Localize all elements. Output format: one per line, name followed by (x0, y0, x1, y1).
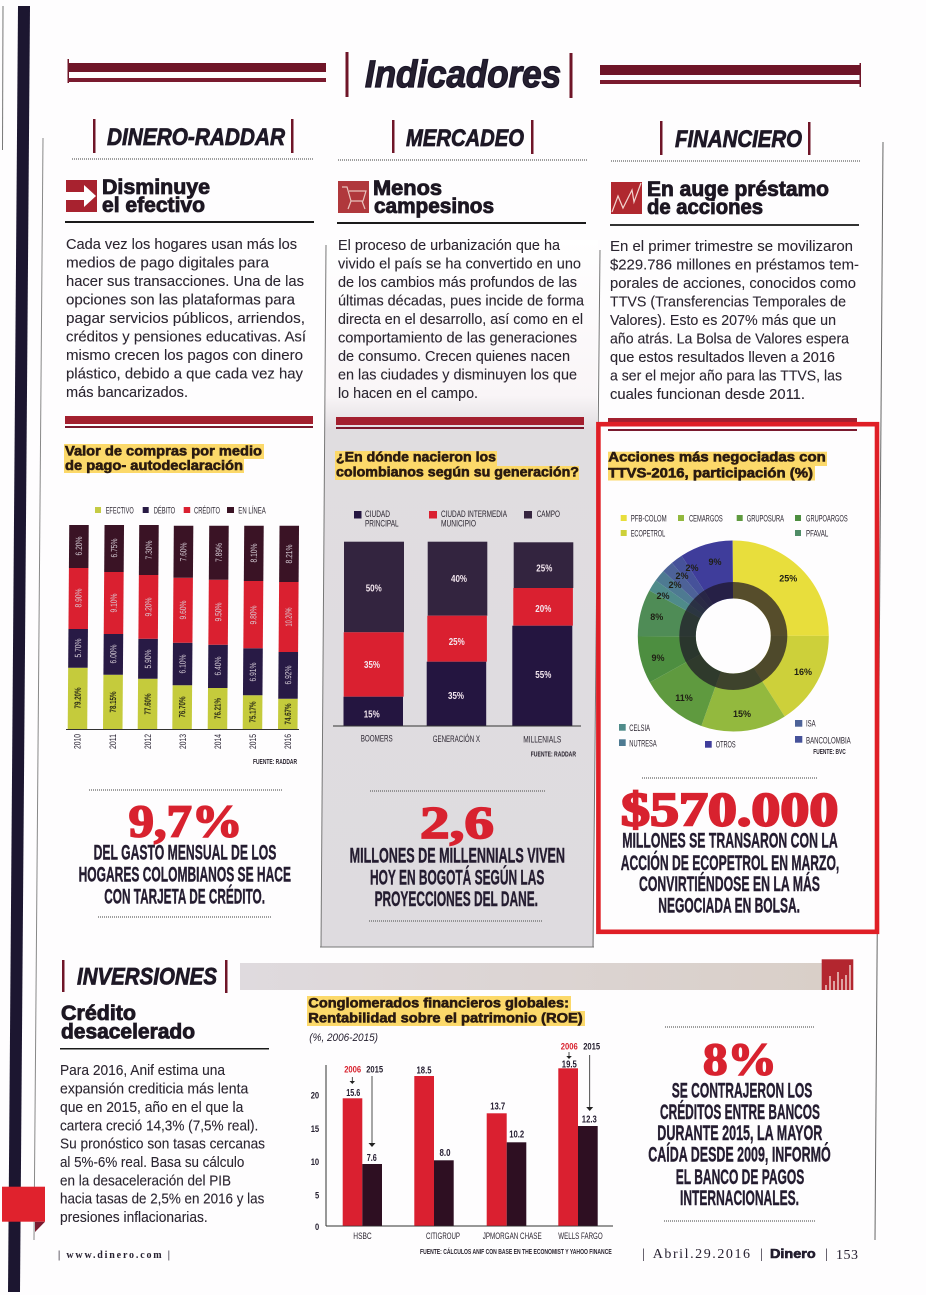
legend: payment methods: EN LÍNEA (238, 506, 266, 516)
donut chart: share by stock: 8% (650, 612, 663, 622)
bar 2015: 8.10% (249, 543, 259, 562)
year axis labels: 2011 (108, 734, 118, 749)
y axis labels: 0 (315, 1222, 319, 1232)
bar 2015: 6.91% (248, 662, 258, 681)
bar: boomers: 50% (366, 584, 382, 594)
x axis labels: JPMORGAN CHASE (483, 1231, 542, 1241)
stacked bar chart: birthplace by generation: MILLENIALS (523, 734, 561, 744)
legend: birthplace: CIUDAD (365, 509, 390, 519)
icon: shopping cart (338, 181, 369, 213)
text block: inversiones: que en 2015, año en el que la (60, 1099, 244, 1116)
bars: JPMorgan Chase (487, 1101, 526, 1226)
legend: bottom of donut: ISA (806, 719, 816, 729)
bar: boomers (344, 542, 404, 726)
callout: 8%: DURANTE 2015, LA MAYOR (657, 1122, 822, 1145)
page spine bar (8, 6, 30, 1292)
bar 2014: 76.21% (213, 698, 223, 719)
text block: inversiones: hacia tasas de 2,5% en 2016 y las (60, 1190, 264, 1208)
text block: financiero: a ser el mejor año para las TTVS, las (610, 368, 842, 384)
callout: 8% (648, 1033, 831, 1210)
footer: date, magazine, page: 153 (836, 1248, 858, 1263)
bar 2013 (172, 526, 193, 729)
text block: financiero: que estos resultados lleven a 2016 (610, 349, 835, 366)
y axis labels: 5 (315, 1190, 319, 1200)
donut chart: share by stock: 16% (794, 667, 812, 677)
bar 2012: 5.90% (143, 649, 153, 668)
bar: generacion x: 25% (449, 637, 465, 648)
bars: Wells Fargo: 19.5 (562, 1059, 577, 1070)
bar 2010: 79.20% (73, 688, 83, 709)
legend: bottom of donut: CELSIA (629, 723, 650, 733)
year axis labels: 2015 (248, 734, 258, 749)
donut chart: share by stock (650, 557, 812, 719)
icon: arrow (66, 180, 97, 212)
donut chart: share by stock: 25% (779, 574, 797, 584)
text block: inversiones (60, 1062, 265, 1226)
bars: Citigroup: 18.5 (416, 1065, 432, 1076)
legend: birthplace: CIUDAD INTERMEDIA (441, 509, 507, 519)
bar: millenials (512, 542, 573, 726)
text block: inversiones: Su pronóstico son tasas cercanas (60, 1136, 265, 1153)
year axis labels: 2016 (283, 734, 293, 749)
heading: MERCADEO: MERCADEO (406, 125, 524, 152)
stacked bar chart: birthplace by generation (333, 542, 581, 744)
bar: boomers: 35% (364, 660, 380, 671)
text block: financiero: $229.786 millones en préstamos tem- (610, 256, 859, 274)
text block: dinero-raddar: medios de pago digitales para (66, 254, 270, 272)
bar 2011: 6.00% (108, 644, 118, 664)
donut chart: share by stock: 2% (656, 591, 670, 601)
x axis labels: CITIGROUP (426, 1231, 460, 1241)
callout: 9,7% (79, 796, 291, 908)
subheading: Menos campesinos: campesinos (374, 195, 494, 218)
callout: 2,6 (350, 797, 565, 911)
subheading: Disminuye el efectivo (102, 176, 210, 217)
bar 2015: 75.17% (248, 701, 258, 722)
legend: top of donut: ECOPETROL (631, 529, 665, 539)
source: anif: FUENTE: CÁLCULOS ANIF CON BASE EN THE ECONOMIST Y YAHOO FINANCE (420, 1247, 612, 1256)
text block: mercadeo (338, 237, 585, 402)
text block: mercadeo: de los cambios más profundos de las (338, 274, 577, 291)
bar 2010: 8.90% (73, 589, 84, 608)
bar: millenials: 25% (536, 564, 552, 574)
legend: top of donut: PFB-COLOM (631, 514, 667, 524)
subheading: Menos campesinos: Menos (373, 177, 442, 200)
footer: date, magazine, page: Dinero (770, 1246, 816, 1261)
chart title: conglomerados: Rentabilidad sobre el patrimonio (ROE) (308, 1010, 583, 1026)
bar 2011: 6.75% (109, 538, 119, 558)
callout: 2,6: PROYECCIONES DEL DANE. (375, 888, 538, 911)
text block: mercadeo: de consumo. Crecen quienes nacen (338, 348, 570, 365)
footer: website: | www.dinero.com | (58, 1250, 170, 1261)
text block: inversiones: al 5%-6% real. Basa su cálculo (60, 1154, 244, 1171)
source: raddar middle: FUENTE: RADDAR (531, 752, 576, 759)
x axis labels: HSBC (353, 1231, 372, 1241)
annotation: HSBC years (344, 1065, 383, 1147)
callout: 9,7%: HOGARES COLOMBIANOS SE HACE (79, 864, 291, 887)
year axis labels: 2014 (213, 734, 223, 749)
subheading: En auge préstamo de acciones: de acciones (647, 196, 763, 219)
text block: dinero-raddar: créditos y pensiones educativas. Así (66, 328, 307, 346)
bars: HSBC (343, 1088, 382, 1226)
text block: dinero-raddar: mismo crecen los pagos con dinero (66, 347, 303, 364)
chart title: acciones (608, 449, 827, 480)
text block: mercadeo: en las ciudades y disminuyen los que (338, 366, 577, 384)
bar 2010 (68, 525, 89, 729)
y axis labels: 20 (311, 1090, 319, 1100)
legend: top of donut: PFAVAL (806, 529, 828, 539)
annotation: Wells Fargo years: 2006 (561, 1041, 578, 1051)
bars: HSBC: 15.6 (346, 1088, 361, 1099)
stacked bar chart: payment method by year (68, 525, 299, 729)
legend: bottom of donut: FUENTE: BVC (813, 749, 846, 756)
footer: date, magazine, page (642, 1246, 858, 1263)
annotation: HSBC years: 2006 (344, 1065, 361, 1075)
year axis labels: 2013 (178, 734, 188, 749)
bar 2014: 6.40% (213, 657, 223, 676)
text block: financiero: En el primer trimestre se movilizaron (610, 238, 853, 255)
bar 2015 (243, 526, 264, 729)
subheading: Credito desacelerado: desacelerado (61, 1020, 195, 1043)
text block: financiero: cuales funcionan desde 2011. (610, 386, 805, 403)
text block: inversiones: Para 2016, Anif estima una (60, 1062, 226, 1079)
chart title: valor de compras: Valor de compras por medio (65, 442, 262, 458)
panel: grey middle column background (321, 240, 598, 947)
icon: bars (822, 959, 853, 990)
chart title: conglomerados: Conglomerados financieros globales: (308, 994, 569, 1010)
callout: 2,6: 2,6 (420, 797, 494, 848)
bar 2016: 74.67% (283, 703, 293, 724)
footer: date, magazine, page: | (760, 1247, 763, 1262)
highlight frame around financiero chart (598, 424, 877, 932)
legend: top of donut: GRUPOSURA (747, 514, 784, 524)
donut chart: share by stock: 9% (651, 653, 665, 663)
legend: birthplace (354, 509, 560, 529)
bar 2011 (103, 525, 124, 729)
text block: inversiones: en la desaceleración del PIB (60, 1172, 231, 1189)
bars: JPMorgan Chase: 13.7 (490, 1101, 506, 1112)
donut chart: share by stock: 9% (708, 557, 722, 567)
callout: $570.000 (621, 784, 839, 918)
stacked bar chart: birthplace by generation: GENERACIÓN X (433, 734, 480, 744)
bar 2015: 9.80% (248, 605, 258, 624)
callout: 2,6: HOY EN BOGOTÁ SEGÚN LAS (370, 865, 544, 889)
subheading: Credito desacelerado (61, 1002, 195, 1043)
y axis labels: 10 (311, 1157, 319, 1167)
bars: Citigroup (414, 1065, 454, 1226)
bars: Citigroup: 8.0 (440, 1148, 451, 1159)
bar 2011: 9.10% (109, 594, 119, 612)
text block: financiero: Valores). Esto es 207% más que un (610, 312, 836, 329)
legend: payment methods: DÉBITO (154, 506, 175, 516)
subheading: Disminuye el efectivo: Disminuye (102, 176, 210, 199)
x axis labels (353, 1231, 603, 1241)
subheading: En auge préstamo de acciones: En auge préstamo (647, 178, 829, 201)
bar: generacion x: 35% (448, 691, 464, 702)
subheading: Credito desacelerado: Crédito (61, 1002, 136, 1025)
bar 2016: 6.92% (283, 665, 293, 684)
bar 2012: 9.20% (143, 597, 153, 616)
bars: Wells Fargo (558, 1059, 598, 1226)
bar: generacion x (427, 542, 487, 726)
title (68, 52, 861, 98)
source: raddar: FUENTE: RADDAR (253, 759, 297, 766)
bars: JPMorgan Chase: 10.2 (509, 1130, 525, 1141)
bar: boomers: 15% (364, 710, 380, 720)
legend: top of donut: CEMARGOS (689, 514, 723, 524)
bar 2016: 10.20% (284, 607, 294, 626)
donut chart: share by stock: 2% (668, 580, 682, 590)
legend: birthplace: CAMPO (537, 509, 560, 519)
annotation: HSBC years: 2015 (366, 1065, 383, 1075)
legend: payment methods (95, 506, 266, 516)
bars: Wells Fargo: 12.3 (582, 1114, 597, 1125)
y axis labels: 15 (311, 1124, 319, 1134)
icon: rising line chart (611, 182, 642, 214)
chart title: generaciones: colombianos según su generación? (336, 464, 579, 480)
legend: birthplace: PRINCIPAL (365, 519, 399, 529)
callout: 8%: 8% (703, 1033, 777, 1084)
bar 2012: 77.60% (143, 693, 153, 714)
bar chart: ROE (311, 1041, 613, 1241)
legend: bottom of donut (619, 719, 851, 756)
text block: mercadeo: lo hacen en el campo. (338, 385, 478, 402)
text block: mercadeo: directa en el desarrollo, así como en el (338, 311, 583, 328)
legend: bottom of donut: BANCOLOMBIA (806, 735, 851, 745)
bar 2014: 9.50% (213, 603, 223, 622)
donut chart: share by stock: 11% (675, 693, 693, 703)
footer: date, magazine, page: | (642, 1247, 645, 1262)
legend: payment methods: EFECTIVO (106, 506, 134, 516)
heading: FINANCIERO: FINANCIERO (675, 126, 802, 153)
bars: HSBC: 7.6 (367, 1153, 377, 1164)
y axis labels (311, 1090, 319, 1232)
legend: bottom of donut: OTROS (716, 740, 736, 750)
year axis labels: 2012 (143, 734, 153, 749)
legend: payment methods: CRÉDITO (194, 506, 220, 516)
chart title: generaciones (335, 448, 579, 480)
chart title: acciones: TTVS-2016, participación (%) (608, 464, 813, 480)
text block: dinero-raddar: hacer sus transacciones. Una de las (66, 273, 304, 290)
text block: mercadeo: comportamiento de las generaciones (338, 330, 577, 346)
text block: financiero: TTVS (Transferencias Temporales de (610, 294, 846, 310)
text block: dinero-raddar: más bancarizados. (66, 384, 188, 401)
chart title: generaciones: ¿En dónde nacieron los (336, 448, 496, 464)
callout: 2,6: MILLONES DE MILLENNIALS VIVEN (350, 844, 565, 867)
text block: inversiones: cartera creció 14,3% (7,5% real). (60, 1117, 258, 1134)
year axis labels (72, 734, 293, 749)
heading: DINERO-RADDAR: DINERO-RADDAR (107, 124, 286, 151)
year axis labels: 2010 (72, 734, 82, 749)
text block: dinero-raddar: opciones son las plataformas para (66, 292, 296, 308)
footer: date, magazine, page: | (825, 1247, 828, 1262)
bar 2011: 78.15% (108, 691, 118, 712)
bar 2013: 76.70% (177, 696, 187, 717)
bar 2014: 7.89% (214, 543, 224, 562)
legend: top of donut (621, 514, 848, 539)
x axis labels: WELLS FARGO (558, 1231, 603, 1241)
bar 2013: 6.10% (178, 654, 188, 674)
subheading: Menos campesinos (373, 177, 494, 218)
legend: top of donut: GRUPOARGOS (806, 514, 848, 524)
donut chart: share by stock: 2% (675, 571, 689, 581)
grey band (240, 963, 822, 990)
donut chart: share by stock: 15% (733, 709, 751, 719)
bar 2013: 7.60% (178, 542, 189, 562)
bar: generacion x: 40% (451, 574, 467, 585)
title: Indicadores (365, 54, 561, 96)
bar 2013: 9.60% (178, 600, 188, 620)
callout: 9,7%: 9,7% (129, 796, 243, 847)
text block: dinero-raddar: Cada vez los hogares usan más los (66, 236, 297, 253)
callout: $570.000: NEGOCIADA EN BOLSA. (658, 895, 800, 918)
heading: INVERSIONES: INVERSIONES (77, 963, 217, 990)
chart title: valor de compras: de pago- autodeclaración (65, 457, 243, 473)
donut chart: share by stock: 2% (685, 563, 699, 573)
callout: $570.000: $570.000 (621, 784, 838, 837)
bar 2012 (138, 525, 159, 729)
text block: inversiones: expansión crediticia más lenta (60, 1080, 249, 1098)
text block: dinero-raddar: plástico, debido a que cada vez hay (66, 366, 303, 382)
subheading: Disminuye el efectivo: el efectivo (102, 194, 205, 217)
subheading: En auge préstamo de acciones (647, 178, 829, 219)
chart title: conglomerados (307, 994, 585, 1026)
stacked bar chart: birthplace by generation: BOOMERS (361, 734, 393, 744)
callout: 9,7%: DEL GASTO MENSUAL DE LOS (94, 841, 276, 864)
text block: financiero: porales de acciones, conocidos como (610, 275, 856, 292)
annotation: Wells Fargo years (561, 1041, 600, 1111)
text block: mercadeo: últimas décadas, pues incide de forma (338, 292, 585, 310)
text block: dinero-raddar (66, 236, 307, 401)
annotation: Wells Fargo years: 2015 (583, 1041, 600, 1051)
text block: financiero: año atrás. La Bolsa de Valores espera (610, 330, 850, 348)
red page tab (2, 1187, 45, 1232)
bar 2016 (278, 526, 299, 729)
callout: 9,7%: CON TARJETA DE CRÉDITO. (104, 885, 265, 908)
text block: inversiones: presiones inflacionarias. (60, 1209, 208, 1226)
callout: 8%: SE CONTRAJERON LOS (672, 1079, 812, 1102)
bar: millenials: 20% (535, 604, 551, 615)
text block: mercadeo: El proceso de urbanización que ha (338, 237, 561, 254)
text block: mercadeo: vivido el país se ha convertido en uno (338, 256, 581, 272)
bar: millenials: 55% (535, 670, 551, 681)
chart title: acciones: Acciones más negociadas con (608, 449, 826, 465)
bar 2010: 5.70% (73, 639, 83, 658)
text block: financiero (610, 238, 859, 403)
footer: date, magazine, page: Abril.29.2016 (653, 1247, 750, 1262)
bar 2012: 7.30% (144, 540, 154, 560)
text block: dinero-raddar: pagar servicios públicos, arriendos, (66, 310, 305, 327)
callout: 8%: INTERNACIONALES. (680, 1187, 799, 1210)
legend: birthplace: MUNICIPIO (441, 519, 476, 529)
callout: 8%: EL BANCO DE PAGOS (676, 1166, 804, 1189)
chart subtitle: (%, 2006-2015) (309, 1032, 378, 1044)
chart title: valor de compras (64, 442, 264, 473)
bar 2014 (208, 526, 229, 729)
bar 2016: 8.21% (284, 544, 294, 564)
bar 2010: 6.20% (74, 537, 84, 556)
legend: bottom of donut: NUTRESA (629, 739, 657, 749)
